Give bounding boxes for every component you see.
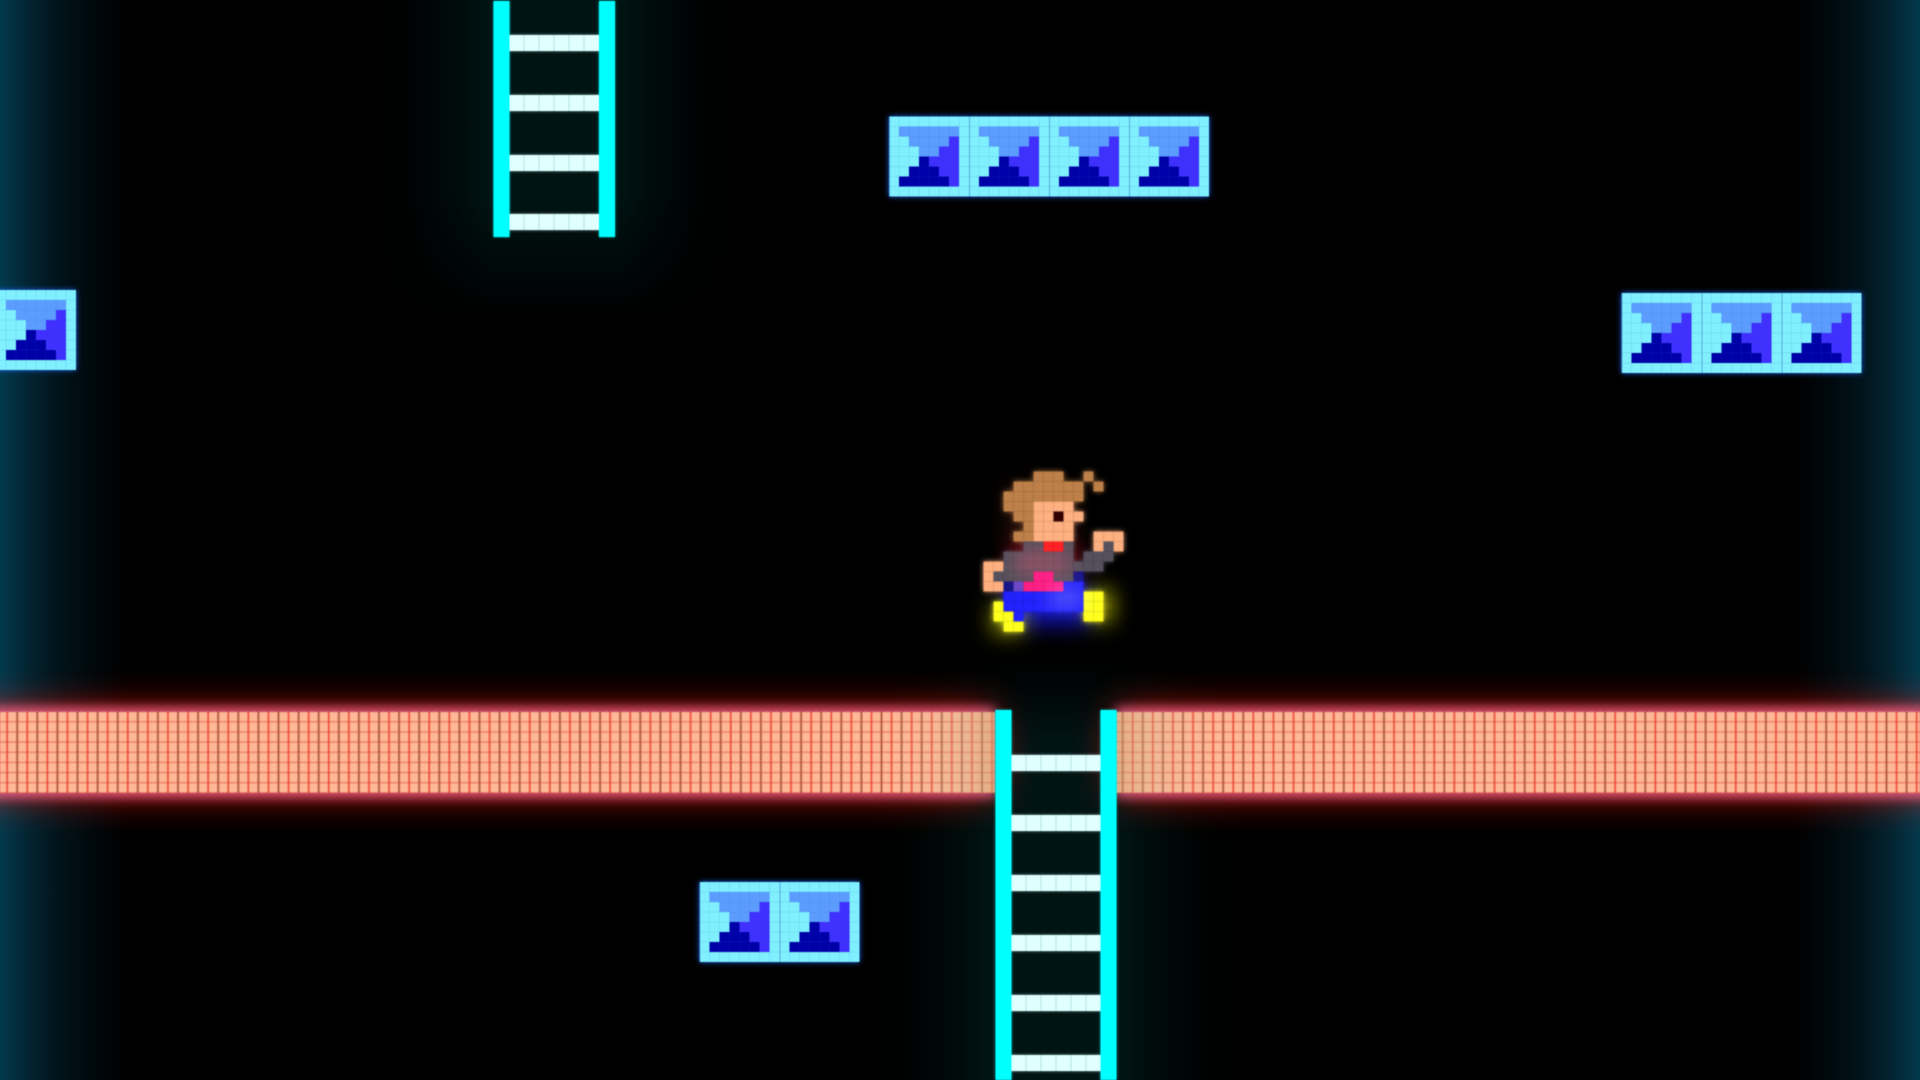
platform: left edge block [0,290,76,370]
lava floor: left section [0,712,995,793]
character light: red chest and blue trouser sheen [1015,550,1082,606]
ladder: top left [494,1,615,237]
pixel grid [984,472,1134,632]
glow: lower ladder [944,696,1168,1080]
trouser shading [1004,572,1084,592]
shoes [994,592,1104,632]
character glow [993,485,1112,633]
trousers [1004,582,1084,622]
skin [984,502,1124,592]
glow: upper ladder [442,0,666,266]
shirt [994,542,1114,582]
glow: lava floor [0,707,1920,798]
ladder: bottom centre [996,710,1116,1080]
collar [1044,542,1064,552]
platform: bottom two blocks [700,882,860,962]
platform: right three blocks [1622,293,1862,373]
right edge glow [1795,0,1920,1080]
hair [1004,472,1104,542]
shirt emblem [1024,572,1064,592]
left edge glow [0,0,125,1080]
character: running boy [984,472,1134,632]
eye [1054,512,1064,522]
lava floor: right section [1116,712,1920,793]
platform: top four blocks [889,116,1209,196]
waist accent [1014,582,1024,592]
